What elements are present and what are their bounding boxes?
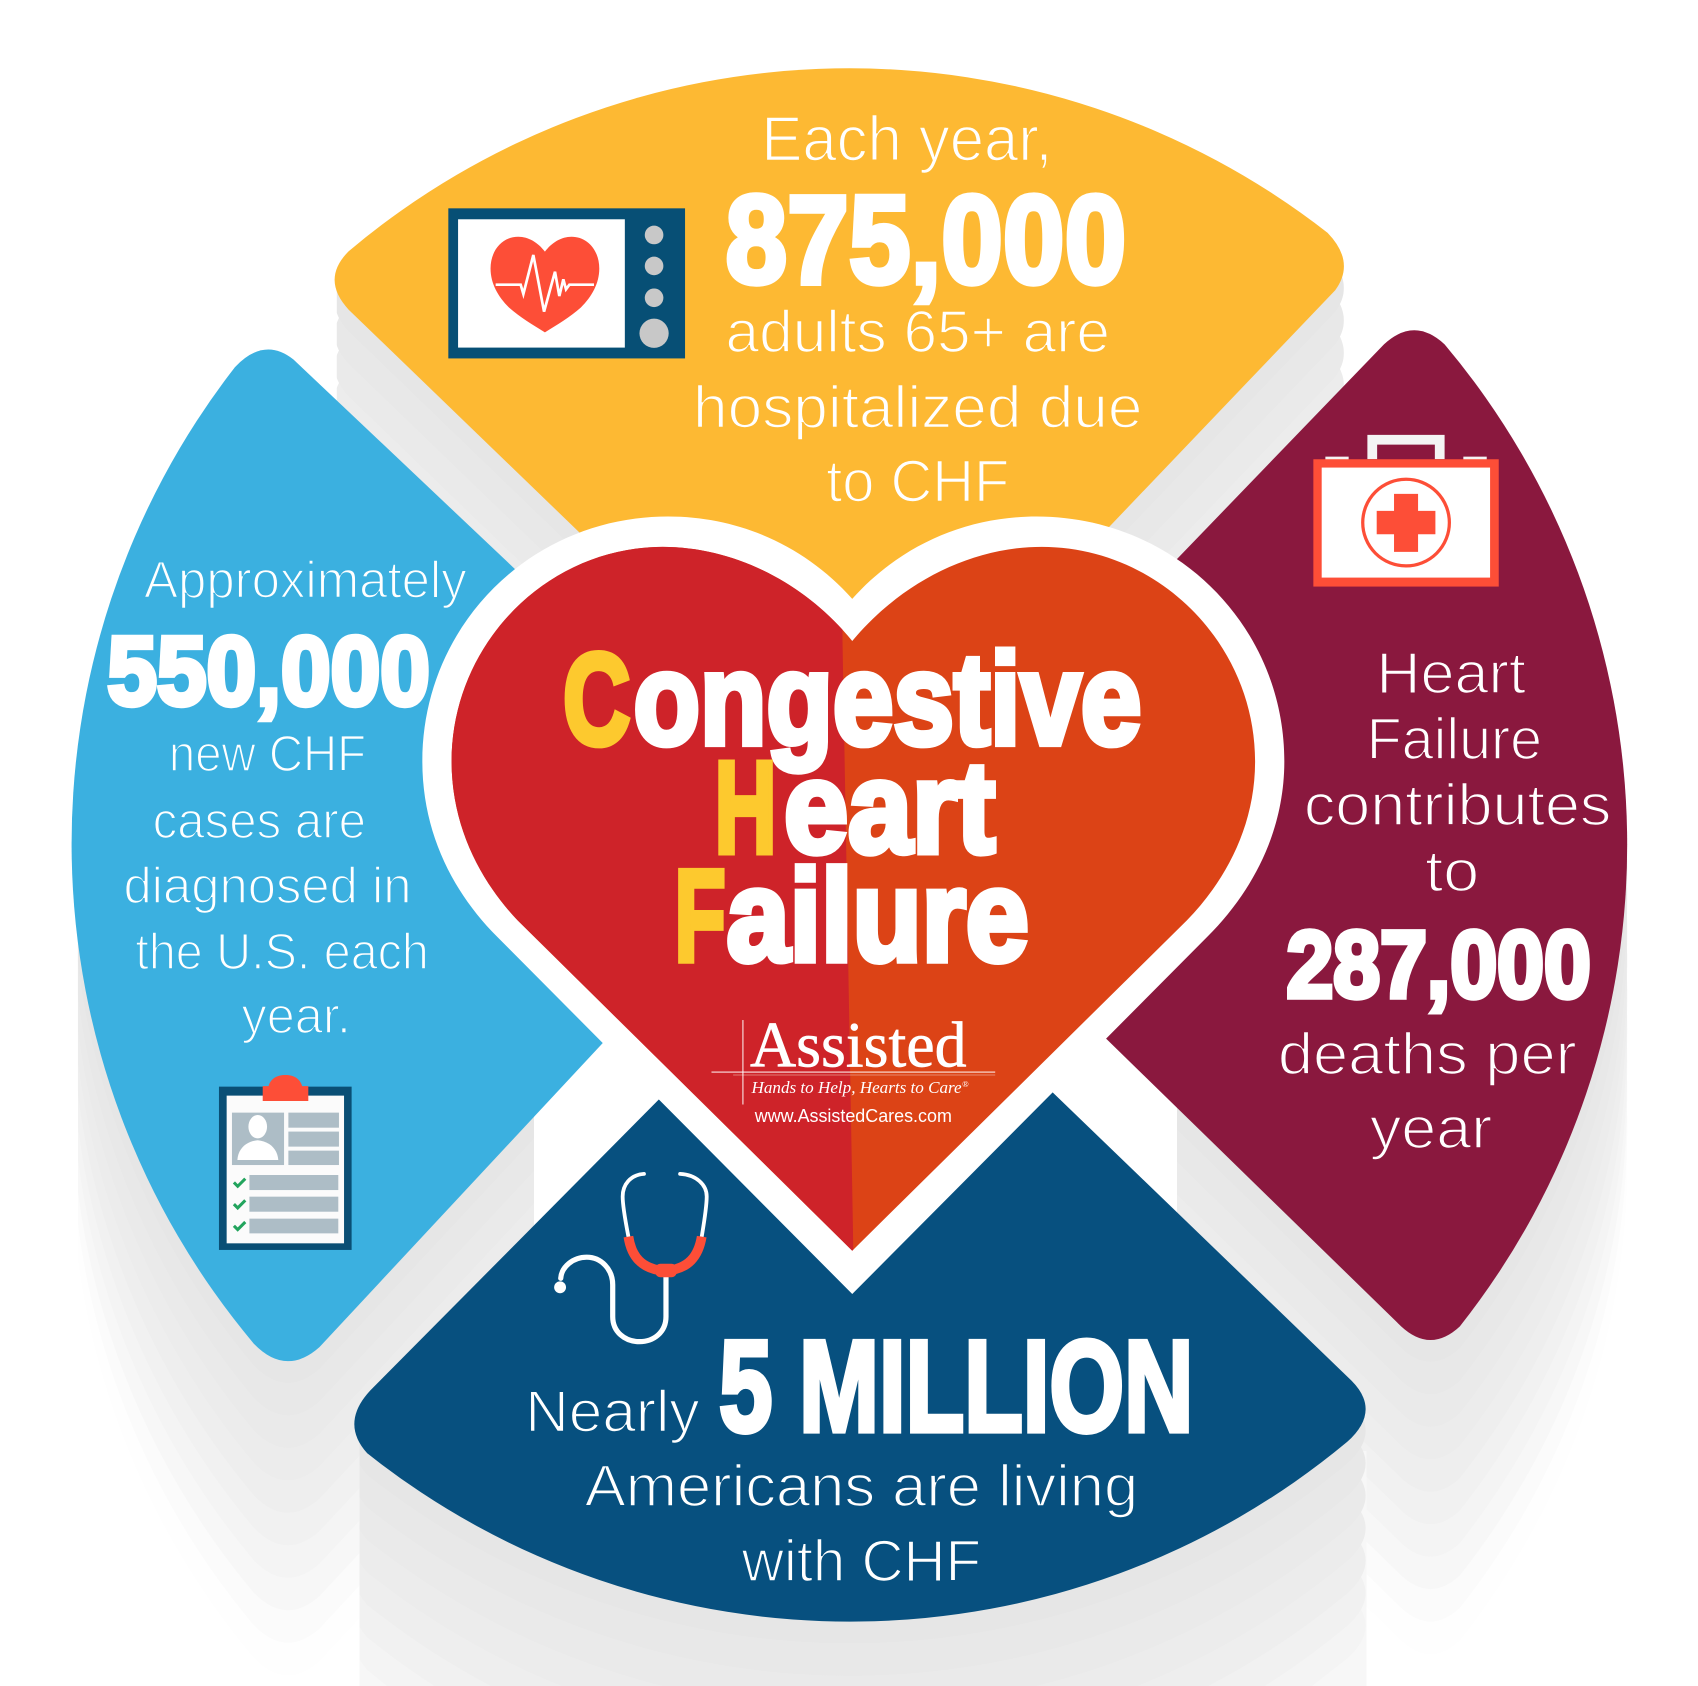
text: new CHF cases: diagnosed in	[123, 857, 412, 914]
text: Heart Failure contributes to: to	[1425, 839, 1479, 904]
logo: Assisted: www.AssistedCares.com	[754, 1105, 952, 1126]
title: Congestive Heart Failure	[563, 626, 1141, 988]
title: Congestive Heart Failure: H	[715, 734, 776, 880]
logo: Assisted: ®	[962, 1079, 969, 1089]
panel: new cases (blue)	[72, 349, 715, 1361]
title: Congestive Heart Failure: ailure	[727, 842, 1029, 988]
icon: stethoscope	[554, 1174, 707, 1342]
logo: Assisted: Hands to Help, Hearts to Care	[751, 1078, 962, 1097]
text: Heart Failure contributes to: contributes	[1304, 773, 1611, 838]
logo: Assisted: Assisted	[750, 1010, 967, 1082]
text: Heart Failure contributes to: Heart	[1376, 641, 1526, 706]
icon: clipboard	[219, 1075, 352, 1250]
icon: heart monitor	[448, 208, 685, 358]
heart right half	[452, 547, 1255, 1251]
text: deaths per year	[1278, 1022, 1577, 1161]
heart white outline	[422, 517, 1284, 1294]
heart left half	[452, 546, 854, 1251]
text: Nearly: Nearly	[525, 1380, 700, 1445]
text: Approximately: Approximately	[144, 552, 467, 610]
blue wedge	[72, 349, 715, 1361]
text: new CHF cases: year.	[241, 987, 351, 1044]
navy wedge	[354, 996, 1366, 1622]
title: Congestive Heart Failure: C	[563, 626, 630, 772]
panel: yearly hospitalizations (yellow)	[335, 68, 1344, 796]
text: adults hospitalized: hospitalized due	[693, 374, 1142, 441]
number: 550,000: 550,000	[107, 616, 430, 725]
text: adults hospitalized: adults 65+ are	[726, 298, 1110, 365]
text: new CHF cases: new CHF	[169, 725, 366, 782]
text: adults hospitalized: to CHF	[826, 447, 1009, 514]
title: Congestive Heart Failure: F	[675, 842, 726, 988]
maroon wedge	[1007, 330, 1627, 1340]
text: Each year: Each year,	[761, 104, 1053, 174]
number: 5 MILLION: 5 MILLION	[719, 1313, 1193, 1459]
text: Heart Failure contributes to: Failure	[1367, 707, 1542, 772]
text: deaths per year: deaths per	[1278, 1022, 1577, 1087]
text: adults hospitalized	[693, 298, 1142, 514]
text: Americans are living with CHF: with CHF	[741, 1529, 981, 1594]
logo: Assisted	[711, 1010, 995, 1126]
yellow wedge	[335, 68, 1344, 796]
text: new CHF cases: cases are	[153, 792, 366, 849]
text: deaths per year: year	[1370, 1096, 1492, 1161]
title: Congestive Heart Failure: eart	[784, 734, 995, 880]
panel: people living with CHF (navy)	[354, 996, 1366, 1622]
number: 875,000: 875,000	[726, 169, 1126, 310]
text: Americans are living with CHF	[585, 1454, 1138, 1594]
text: new CHF cases	[123, 725, 429, 1044]
panel: deaths (maroon)	[1007, 330, 1627, 1340]
number: 287,000: 287,000	[1286, 912, 1591, 1017]
text: new CHF cases: the U.S. each	[135, 923, 429, 980]
icon: first aid kit	[1313, 440, 1499, 587]
title: Congestive Heart Failure: ongestive	[634, 626, 1141, 772]
heart	[422, 517, 1284, 1294]
text: Heart Failure contributes to	[1304, 641, 1611, 904]
text: Americans are living with CHF: Americans are living	[585, 1454, 1138, 1519]
